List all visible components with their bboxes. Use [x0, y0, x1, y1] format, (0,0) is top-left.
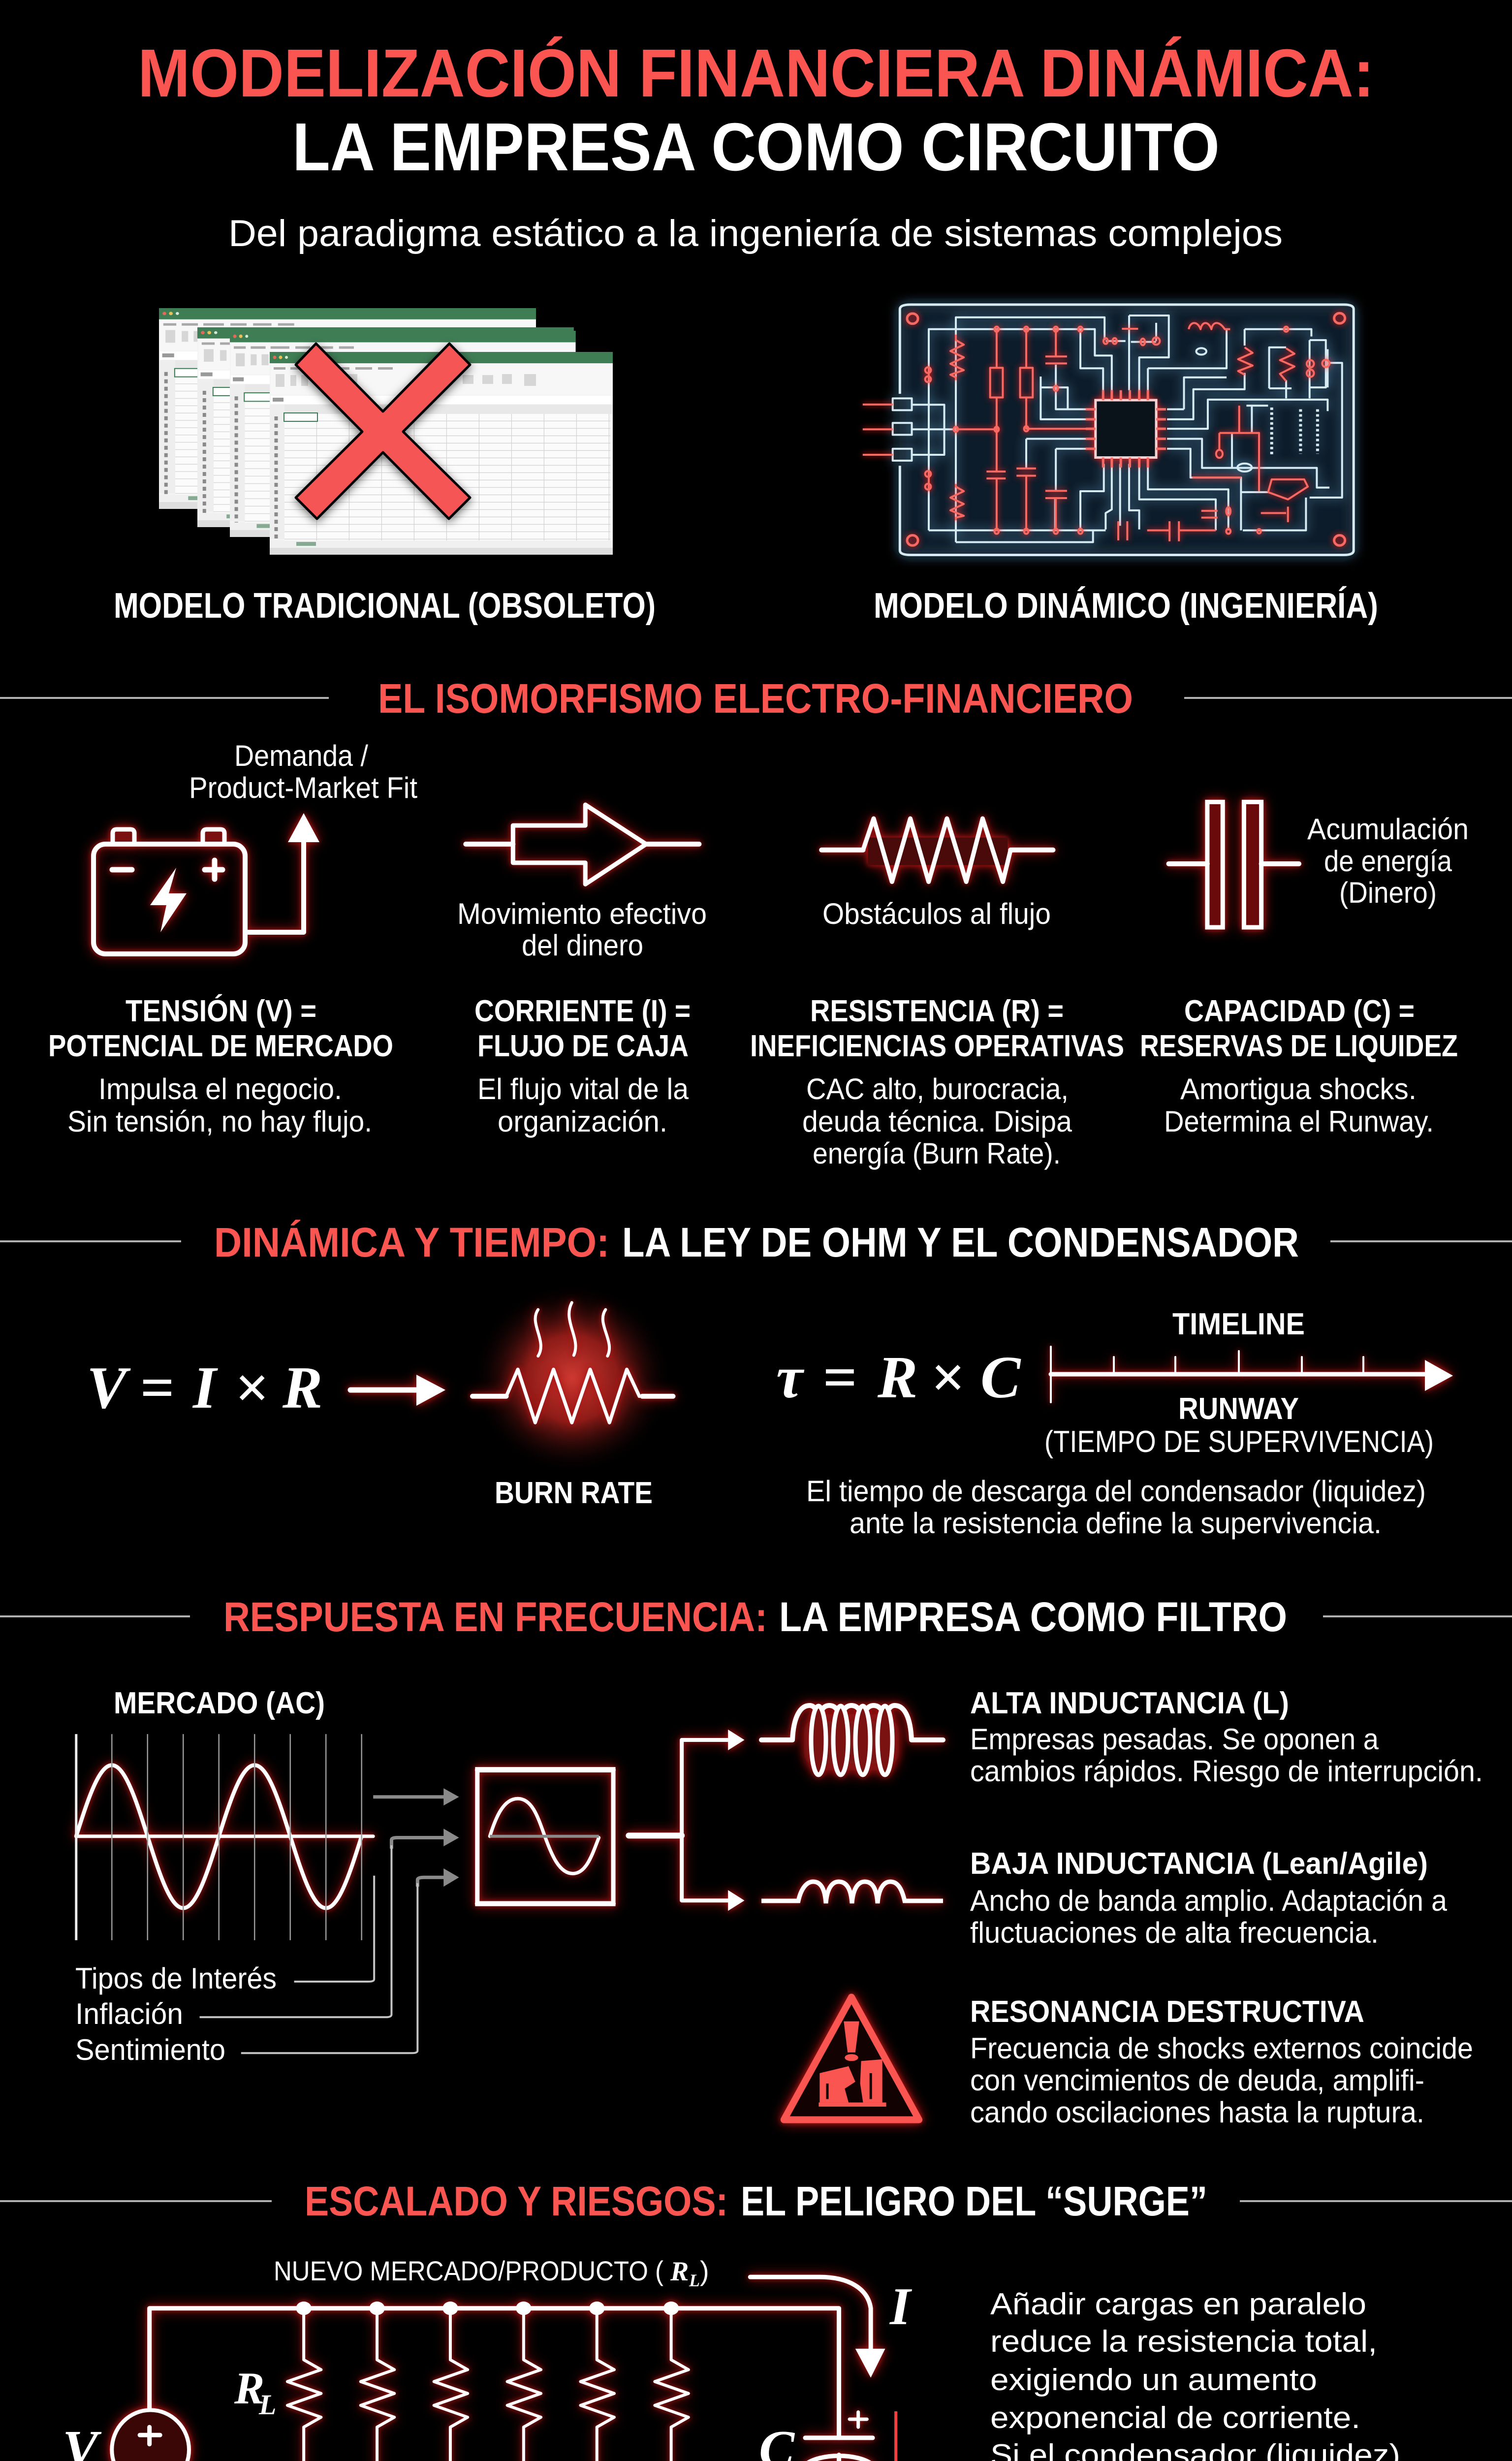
text block: resistencia: RESISTENCIA (R) =: [810, 994, 1064, 1028]
section heading: dinámica y tiempo: LA LEY DE OHM Y EL CONDENSADOR: [622, 1219, 1299, 1265]
text block: brownout explanation: exigiendo un aumento: [990, 2363, 1317, 2397]
icon: resistor: [821, 819, 1053, 882]
text block: alta inductancia: cambios rápidos. Riesgo de interrupción.: [970, 1755, 1483, 1788]
chart: timeline: [1044, 1307, 1453, 1459]
label: nuevo mercado top: R: [670, 2256, 689, 2287]
label: mercado: MERCADO (AC): [114, 1686, 325, 1720]
chart: timeline: RUNWAY: [1178, 1392, 1299, 1426]
text block: resistencia: CAC alto, burocracia,: [806, 1073, 1069, 1105]
icon: current arrow: [466, 805, 699, 884]
labels: tipos, inflación, sentimiento: Inflación: [75, 1997, 183, 2030]
label: movimiento: del dinero: [522, 929, 643, 962]
icon: high inductance coil: [761, 1705, 943, 1775]
text block: brownout explanation: [990, 2287, 1434, 2461]
text block: alta inductancia: [970, 1686, 1483, 1788]
text block: tensión: Sin tensión, no hay flujo.: [67, 1105, 372, 1138]
text block: tensión: POTENCIAL DE MERCADO: [48, 1029, 393, 1063]
circuit symbols: [63, 2277, 913, 2461]
label: demanda: Demanda /: [234, 739, 368, 772]
icon: resonance warning: [784, 1997, 919, 2120]
label: nuevo mercado top: ): [700, 2255, 709, 2286]
text block: corriente: [474, 994, 691, 1138]
text block: tensión: Impulsa el negocio.: [98, 1073, 342, 1105]
text block: baja inductancia: Ancho de banda amplio. Adaptación a: [970, 1884, 1448, 1917]
text block: capacidad: Determina el Runway.: [1164, 1105, 1434, 1138]
icon: filter box: [477, 1769, 613, 1904]
label: acumulación: Acumulación: [1307, 813, 1469, 846]
text block: baja inductancia: fluctuaciones de alta frecuencia.: [970, 1916, 1379, 1949]
chart: sine wave: [76, 1734, 373, 1940]
text block: descarga: El tiempo de descarga del condensador (liquidez): [806, 1475, 1426, 1508]
icon: red cross: [296, 344, 470, 519]
text block: corriente: CORRIENTE (I) =: [474, 994, 691, 1028]
text block: capacidad: RESERVAS DE LIQUIDEZ: [1140, 1029, 1458, 1063]
label: movimiento: [457, 897, 707, 962]
labels: tipos, inflación, sentimiento: Sentimiento: [75, 2033, 225, 2066]
text block: baja inductancia: BAJA INDUCTANCIA (Lean/Agile): [970, 1847, 1428, 1881]
text block: brownout explanation: reduce la resistencia total,: [990, 2325, 1377, 2359]
arrows: macro inputs: [200, 1788, 459, 2053]
section heading: dinámica y tiempo: DINÁMICA Y TIEMPO:: [214, 1219, 609, 1265]
icon: voltage source: [112, 2410, 189, 2461]
label: modelo dinámico: MODELO DINÁMICO (INGENIERÍA): [874, 586, 1378, 626]
icon: capacitor: [1169, 802, 1299, 927]
icon: battery: [94, 813, 319, 954]
circuit symbols: L: [258, 2389, 276, 2421]
formula: ley de Ohm: V=I×R: [87, 1355, 322, 1421]
labels: tipos, inflación, sentimiento: [75, 1962, 277, 2066]
circuit symbols: R: [234, 2363, 264, 2413]
text block: resistencia: [750, 994, 1124, 1170]
text block: resistencia: INEFICIENCIAS OPERATIVAS: [750, 1029, 1124, 1063]
text block: resonancia: Frecuencia de shocks externos coincide: [970, 2032, 1473, 2065]
label: nuevo mercado top: L: [689, 2271, 700, 2290]
label: nuevo mercado top: NUEVO MERCADO/PRODUCTO (: [274, 2255, 663, 2286]
text block: capacidad: [1140, 994, 1458, 1138]
section heading: respuesta en frecuencia: LA EMPRESA COMO FILTRO: [779, 1594, 1287, 1640]
text block: corriente: FLUJO DE CAJA: [477, 1029, 689, 1063]
text block: corriente: organización.: [498, 1105, 667, 1138]
arrows: filter outputs: [629, 1730, 745, 1911]
text block: resonancia: [970, 1995, 1473, 2129]
icon: glowing circuit board: [863, 305, 1354, 556]
text block: descarga: ante la resistencia define la supervivencia.: [850, 1507, 1382, 1540]
formula: constante de tiempo: τ=R×C: [776, 1344, 1021, 1411]
label: acumulación: de energía: [1324, 845, 1452, 878]
text block: brownout explanation: Añadir cargas en paralelo: [990, 2287, 1366, 2321]
labels: tipos, inflación, sentimiento: Tipos de Interés: [75, 1962, 277, 1995]
title: LA EMPRESA COMO CIRCUITO: [292, 109, 1220, 185]
icon: hot resistor: [471, 1282, 673, 1474]
arrow: ohm to burn rate: [350, 1375, 445, 1406]
section heading: dinámica y tiempo: [0, 1219, 1512, 1265]
text block: capacidad: CAPACIDAD (C) =: [1184, 994, 1415, 1028]
label: movimiento: Movimiento efectivo: [457, 897, 707, 930]
text block: baja inductancia: [970, 1847, 1448, 1949]
label: modelo tradicional: MODELO TRADICIONAL (OBSOLETO): [114, 586, 656, 626]
text block: corriente: El flujo vital de la: [477, 1073, 689, 1105]
text block: alta inductancia: Empresas pesadas. Se oponen a: [970, 1723, 1379, 1756]
section heading: escalado y riesgos: [0, 2178, 1512, 2224]
chart: parallel load circuit: [112, 2277, 885, 2461]
label: burn rate: BURN RATE: [495, 1476, 653, 1510]
subtitle: Del paradigma estático a la ingeniería de sistemas complejos: [228, 213, 1283, 254]
title: MODELIZACIÓN FINANCIERA DINÁMICA:: [138, 35, 1374, 111]
text block: resistencia: deuda técnica. Disipa: [802, 1105, 1072, 1138]
text block: resonancia: cando oscilaciones hasta la ruptura.: [970, 2096, 1424, 2129]
label: demanda: [189, 739, 417, 804]
icon: low inductance coil: [761, 1882, 943, 1903]
text block: tensión: TENSIÓN (V) =: [126, 994, 316, 1028]
section heading: escalado y riesgos: ESCALADO Y RIESGOS:: [305, 2178, 728, 2224]
label: acumulación: [1307, 813, 1469, 909]
section heading: respuesta en frecuencia: RESPUESTA EN FRECUENCIA:: [223, 1594, 767, 1640]
text block: tensión: [48, 994, 393, 1138]
text block: capacidad: Amortigua shocks.: [1180, 1073, 1417, 1105]
label: demanda: Product-Market Fit: [189, 771, 417, 804]
icon: stacked spreadsheets crossed out: [159, 308, 613, 555]
text block: resonancia: RESONANCIA DESTRUCTIVA: [970, 1995, 1364, 2029]
label: obstáculos: Obstáculos al flujo: [822, 897, 1051, 930]
chart: timeline: TIMELINE: [1172, 1307, 1305, 1341]
text block: descarga: [806, 1475, 1426, 1540]
text block: alta inductancia: ALTA INDUCTANCIA (L): [970, 1686, 1289, 1720]
section heading: respuesta en frecuencia: [0, 1594, 1512, 1640]
section heading: isomorfismo: EL ISOMORFISMO ELECTRO-FINANCIERO: [378, 675, 1133, 722]
section heading: escalado y riesgos: EL PELIGRO DEL “SURGE”: [741, 2178, 1207, 2224]
text block: resonancia: con vencimientos de deuda, amplifi-: [970, 2064, 1424, 2097]
chart: timeline: (TIEMPO DE SUPERVIVENCIA): [1044, 1425, 1434, 1459]
circuit symbols: I: [889, 2277, 913, 2336]
text block: resistencia: energía (Burn Rate).: [813, 1137, 1061, 1170]
text block: brownout explanation: exponencial de corriente.: [990, 2401, 1360, 2435]
title: [138, 35, 1374, 185]
arrow: voltage drop: [284, 2411, 908, 2461]
label: acumulación: (Dinero): [1339, 876, 1437, 909]
